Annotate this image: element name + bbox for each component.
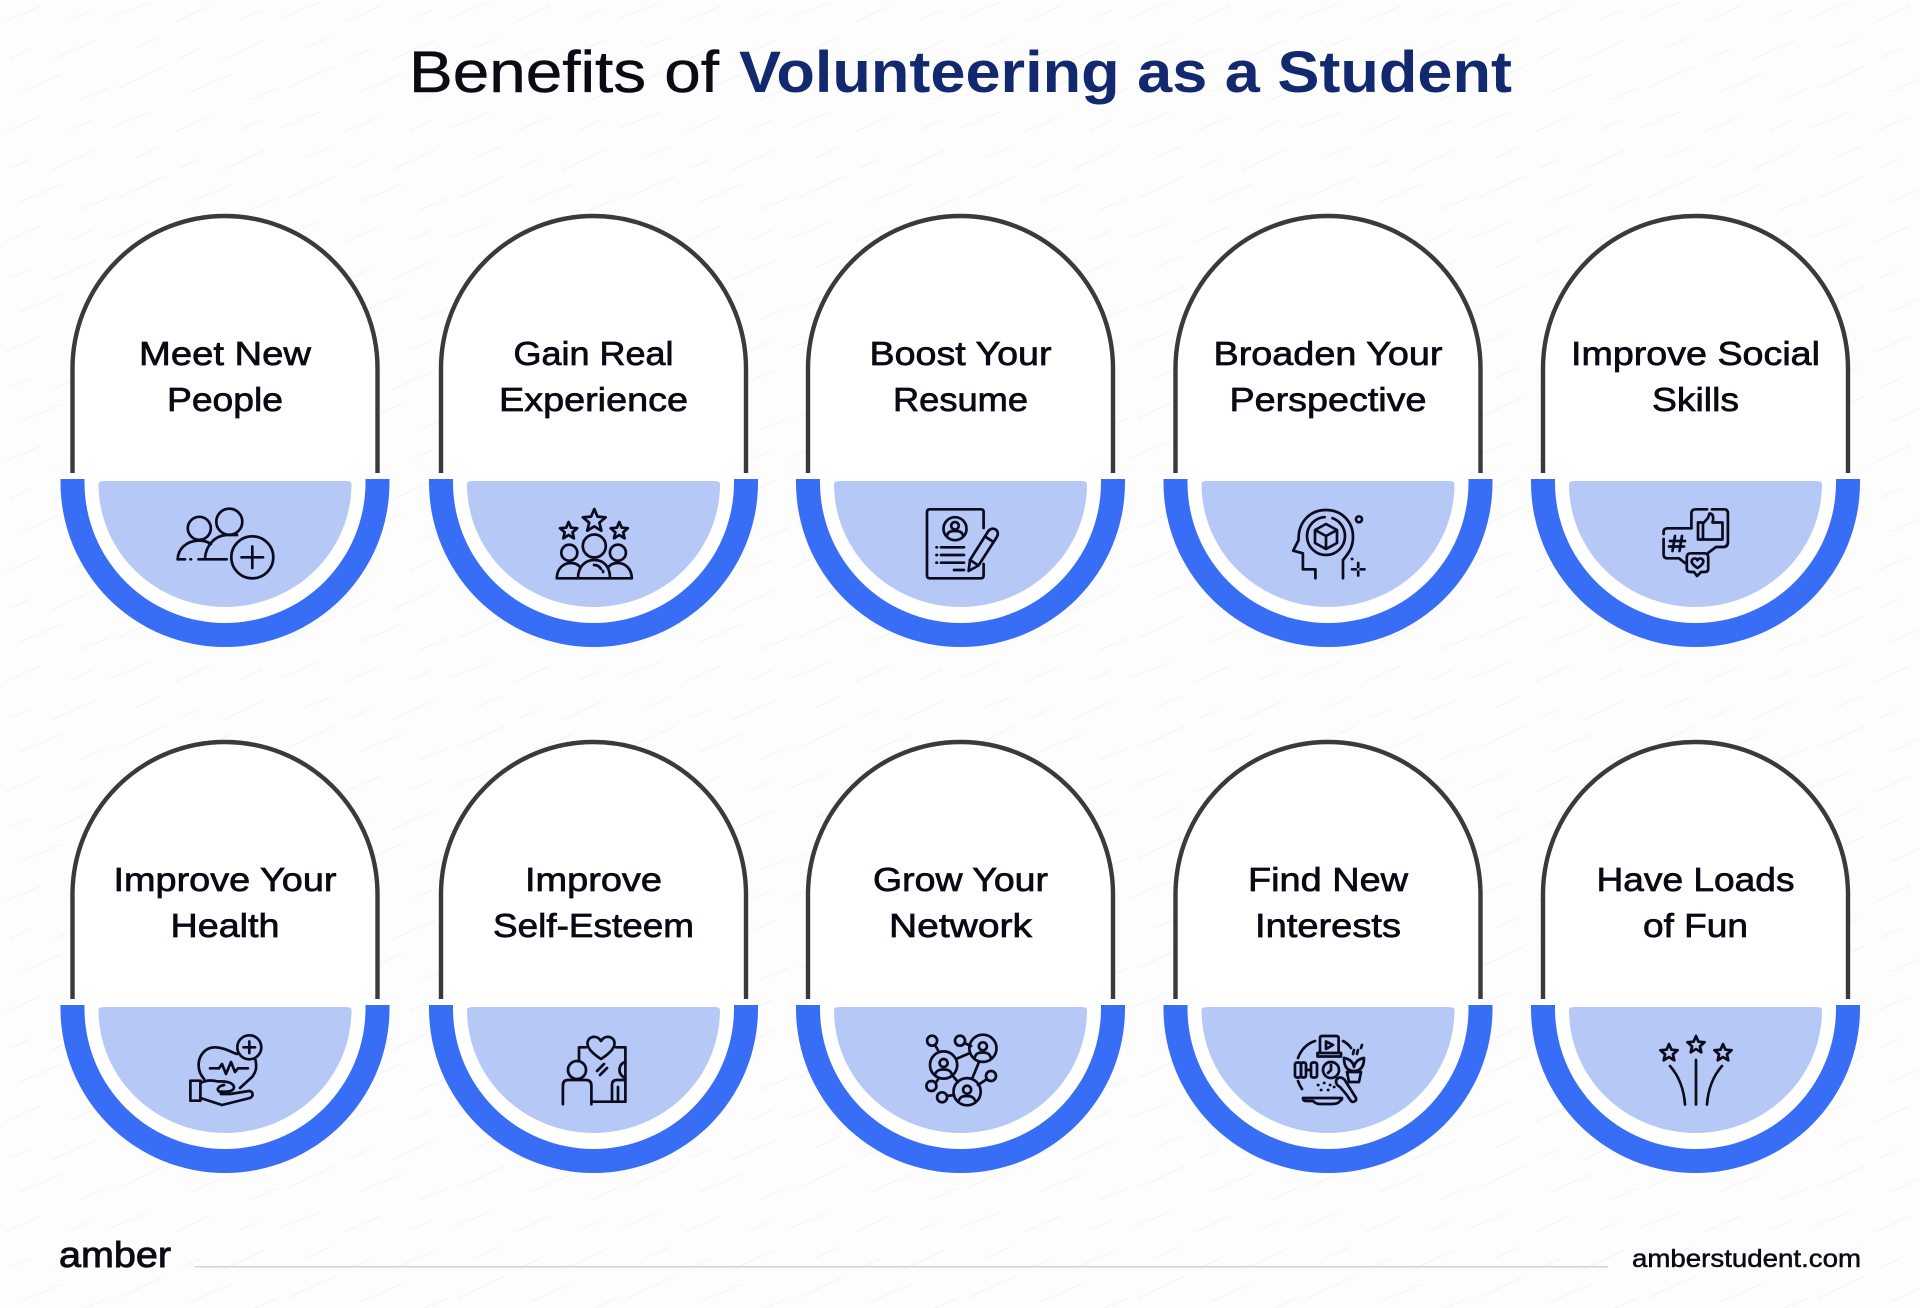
title: [409, 40, 1512, 105]
panel: Boost Your Resume: Resume: [893, 381, 1028, 418]
panel: Gain Real Experience: Gain Real: [514, 335, 674, 372]
panel: Grow Your Network: [796, 742, 1125, 1173]
icon: hobbies: [1295, 1036, 1364, 1104]
panel: Find New Interests: Interests: [1255, 907, 1401, 944]
icon: heart in hand: [190, 1035, 261, 1105]
panel: Have Loads of Fun: of Fun: [1643, 907, 1748, 944]
title: Benefits of: [409, 40, 720, 105]
icon: people with stars: [557, 509, 632, 578]
panel: Broaden Your Perspective: Perspective: [1230, 381, 1426, 418]
panel: Improve Your Health: Improve Your: [113, 861, 337, 898]
panel: Gain Real Experience: Experience: [499, 381, 688, 418]
footer divider: [195, 1266, 1608, 1268]
panel: Improve Self-Esteem: Improve: [525, 861, 662, 898]
panel: Improve Your Health: Health: [170, 907, 280, 944]
panel: Boost Your Resume: Boost Your: [870, 335, 1052, 372]
panel: Improve Your Health: [60, 742, 390, 1173]
icon: network of people: [926, 1035, 997, 1105]
panel: Gain Real Experience: [429, 216, 758, 647]
panel: Broaden Your Perspective: Broaden Your: [1214, 335, 1443, 372]
panel: Improve Social Skills: [1531, 216, 1860, 647]
panel: Find New Interests: [1164, 742, 1492, 1173]
icon: social bubbles: [1664, 509, 1728, 576]
icon: self-esteem mirror: [563, 1037, 625, 1104]
panel: Meet New People: Meet New: [139, 335, 311, 372]
panel: Improve Self-Esteem: Self-Esteem: [493, 907, 694, 944]
panel: Meet New People: People: [167, 381, 283, 418]
panel: Have Loads of Fun: Have Loads: [1596, 861, 1794, 898]
panel: Improve Self-Esteem: [429, 742, 758, 1173]
icon: head with cube: [1293, 510, 1364, 578]
panel: Grow Your Network: Network: [889, 907, 1033, 944]
panel: Improve Social Skills: Skills: [1652, 381, 1739, 418]
panel: Improve Social Skills: Improve Social: [1571, 335, 1820, 372]
logo: amber: amber: [59, 1234, 171, 1275]
icon: resume with pencil: [927, 509, 998, 578]
panel: Have Loads of Fun: [1531, 742, 1860, 1173]
panel: Broaden Your Perspective: [1164, 216, 1492, 647]
icon: stars and fireworks: [1660, 1036, 1732, 1104]
panel: Find New Interests: Find New: [1248, 861, 1408, 898]
title: Volunteering as a Student: [739, 40, 1512, 105]
icon: people with plus: [178, 509, 273, 578]
panel: Grow Your Network: Grow Your: [873, 861, 1048, 898]
panel: Boost Your Resume: [796, 216, 1125, 647]
panel: Meet New People: [60, 216, 390, 647]
website url: amberstudent.com: [1632, 1245, 1861, 1273]
